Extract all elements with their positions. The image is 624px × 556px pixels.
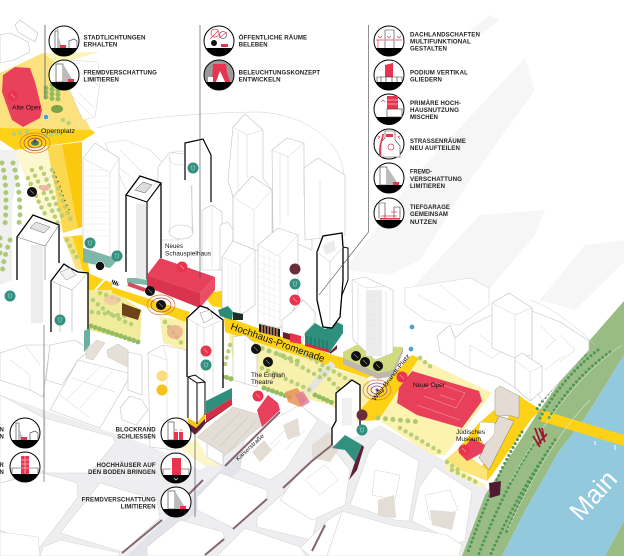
- beige tower: [495, 386, 519, 418]
- towers east of Neue Oper: [437, 293, 589, 401]
- black tower west: [17, 215, 59, 330]
- red markers: [8, 90, 470, 456]
- icon: Beleuchtungskonzept entwickeln: [204, 60, 234, 90]
- text: cropped left labels: [0, 428, 5, 476]
- Jüdisches Museum building: [459, 438, 485, 461]
- plaza label: Willy-Brandt-Platz: [372, 354, 412, 402]
- place labels: Jüdisches: [456, 429, 485, 436]
- dark red markers: [290, 264, 368, 420]
- plaza tower: [343, 277, 403, 379]
- place labels: Neues: [165, 243, 183, 250]
- teal podium tower D: [83, 248, 122, 268]
- bridge: [540, 410, 624, 446]
- place labels: The English: [251, 372, 285, 379]
- text: Fremdverschattung limitieren: FREMDVERSCHATTUNG: [84, 70, 157, 76]
- teal and red podium front tower: [196, 388, 232, 435]
- marker glyphs: [8, 94, 466, 452]
- subway markers: [43, 114, 415, 352]
- bridge supports: [595, 441, 615, 450]
- icon: Primäre Hochhausnutzung: [374, 94, 404, 125]
- icon: Hochhäuser auf den Boden bringen: [161, 453, 191, 483]
- icon: Öffentliche Räume beleben: [204, 26, 234, 56]
- ground south: [0, 395, 490, 556]
- text: Strassenräume: NEU AUFTEILEN: [410, 146, 460, 152]
- text: Beleuchtungskonzept entwickeln: BELEUCHTUNGSKONZEPT: [239, 70, 320, 76]
- teal facade west tower: [84, 328, 90, 352]
- street label: Kaiserstraße: [235, 434, 266, 462]
- icon: Fremdverschattung: [374, 163, 404, 193]
- beige row Kaiserstrasse: [197, 407, 260, 466]
- tall white towers centre: [158, 114, 345, 270]
- text: Strassenräume: [410, 138, 466, 152]
- text: Primäre Hochhausnutzung: [410, 100, 461, 121]
- text: Tiefgarage: [410, 205, 450, 226]
- text: Primäre Hochhausnutzung: PRIMÄRE HOCH-: [410, 100, 461, 107]
- diagonal park path: [307, 363, 333, 393]
- text: Stadtlichtungen erhalten: ERHALTEN: [84, 42, 118, 48]
- icon: Tiefgarage: [374, 198, 404, 228]
- icon: Stadtlichtungen erhalten: [49, 26, 79, 56]
- place labels: Neue Oper: [413, 382, 446, 389]
- text: Tiefgarage: GEMEINSAM: [410, 212, 448, 218]
- text: Stadtlichtungen erhalten: STADTLICHTUNGEN: [84, 36, 146, 42]
- tower front black: [187, 306, 223, 403]
- text: Öffentliche Räume beleben: [239, 34, 307, 48]
- river bank trees: [468, 345, 622, 556]
- river Main: [502, 355, 624, 556]
- road edge stripes: [122, 412, 332, 555]
- bank east corner: [605, 521, 624, 556]
- city blocks south: [0, 395, 472, 556]
- tower detail lines: [148, 345, 178, 450]
- park trees promenade west: [91, 275, 183, 345]
- lens tower black outline: [317, 233, 348, 328]
- slim black-outlined tower north: [185, 139, 211, 202]
- black tower second west: [51, 264, 88, 332]
- text: Öffentliche Räume beleben: BELEBEN: [239, 42, 268, 48]
- leader lines: [44, 25, 368, 517]
- icon: Fremdverschattung limitieren: [49, 60, 79, 90]
- yellow zone: park east of the promenade: [224, 316, 542, 486]
- icon: Blockrand schliessen: [161, 418, 191, 448]
- Kaiserstrasse band: [127, 413, 300, 556]
- dark pavilion: [489, 481, 501, 498]
- text: Tiefgarage: NUTZEN: [410, 220, 437, 226]
- text: Beleuchtungskonzept entwickeln: [239, 70, 320, 84]
- icon: Strassenräume: [374, 129, 404, 159]
- block complex west: [0, 340, 148, 428]
- text: Fremdverschattung limitieren: [84, 70, 157, 84]
- proximity rings: [20, 133, 391, 400]
- icon: lower left high-rise: [10, 452, 40, 482]
- text: Fremdverschattung: [410, 170, 462, 190]
- place labels: Schauspielhaus: [165, 250, 211, 258]
- text: Hochhäuser auf den Boden bringen: HOCHHÄUSER AUF: [97, 462, 156, 469]
- text: Fremdverschattung limitieren lower: [82, 498, 156, 511]
- park trees near Oper: [0, 85, 80, 275]
- text: Fremdverschattung limitieren lower: FREMDVERSCHATTUNG: [82, 498, 156, 504]
- text: Primäre Hochhausnutzung: HAUSNUTZUNG: [410, 108, 459, 114]
- black tower at Kaiserstrasse: [332, 380, 364, 480]
- place labels: Museum: [456, 436, 481, 443]
- building shadows: [345, 15, 624, 320]
- text: Fremdverschattung limitieren lower: LIMITIEREN: [121, 505, 156, 511]
- teal podium lens tower: [305, 322, 343, 354]
- text: Beleuchtungskonzept entwickeln: ENTWICKELN: [239, 78, 281, 84]
- Neues Schauspielhaus: [147, 258, 215, 308]
- Neue Oper building: [397, 371, 482, 428]
- icon: Dachlandschaften: [374, 26, 404, 56]
- place labels: [12, 104, 485, 443]
- teal podium Schauspielhaus: [127, 272, 147, 285]
- text: Fremdverschattung: VERSCHATTUNG: [410, 177, 462, 183]
- icon: Fremdverschattung limitieren lower: [161, 487, 191, 517]
- text: Primäre Hochhausnutzung: MISCHEN: [410, 115, 438, 121]
- text: Blockrand schliessen: SCHLIESSEN: [117, 434, 156, 440]
- icon: Podium vertikal: [374, 60, 404, 90]
- text: Fremdverschattung: LIMITIEREN: [410, 184, 445, 190]
- text: Dachlandschaften: DACHLANDSCHAFTEN: [410, 32, 480, 38]
- text: Hochhäuser auf den Boden bringen: [88, 462, 156, 476]
- place labels: Opernplatz: [41, 128, 75, 135]
- teal markers: [4, 162, 368, 436]
- river bank: [462, 301, 624, 556]
- text: Dachlandschaften: [410, 32, 480, 52]
- text: Hochhäuser auf den Boden bringen: DEN BODEN BRINGEN: [88, 470, 156, 476]
- black markers: [27, 187, 383, 371]
- neighbourhood outlines north: [0, 20, 595, 345]
- ground west arc: [0, 150, 22, 285]
- river label: Main: [563, 464, 623, 526]
- black tower with roof plate: [126, 176, 161, 280]
- text: Öffentliche Räume beleben: ÖFFENTLICHE RÄUME: [239, 34, 307, 42]
- promenade label: Hochhaus-Promenade: [229, 321, 327, 365]
- text: Fremdverschattung: FREMD-: [410, 170, 432, 176]
- text: Blockrand schliessen: [116, 428, 156, 440]
- icon: lower left clearings: [10, 418, 40, 448]
- text: Podium vertikal: [410, 70, 468, 84]
- text: Stadtlichtungen erhalten: [84, 36, 146, 48]
- towers near promenade centre: [218, 228, 315, 387]
- text: Tiefgarage: TIEFGARAGE: [410, 205, 450, 211]
- text: Dachlandschaften: GESTALTEN: [410, 46, 447, 52]
- place labels: Theatre: [251, 379, 273, 386]
- place labels: Alte Oper: [12, 104, 42, 112]
- park trees east: [218, 345, 480, 484]
- yellow markers: [156, 370, 168, 396]
- text: Dachlandschaften: MULTIFUNKTIONAL: [410, 40, 471, 46]
- text: Podium vertikal: PODIUM VERTIKAL: [410, 70, 468, 76]
- text: Blockrand schliessen: BLOCKRAND: [116, 428, 156, 434]
- beige blocks behind park: [86, 340, 128, 367]
- yellow zone: promenade west and park: [88, 287, 225, 466]
- beige museum wing: [478, 416, 514, 470]
- tower D: [83, 143, 119, 257]
- text: Strassenräume: STRASSENRÄUME: [410, 138, 466, 145]
- text: Fremdverschattung limitieren: LIMITIEREN: [84, 78, 119, 84]
- lower black tower: [188, 375, 205, 435]
- Alte Oper building: [2, 67, 42, 127]
- red installation on the bank: [533, 428, 547, 447]
- tower in front of park: [148, 345, 187, 450]
- text: Podium vertikal: GLIEDERN: [410, 78, 442, 84]
- English Theatre building: [257, 395, 280, 427]
- yellow zone: Alte Oper: [0, 52, 112, 293]
